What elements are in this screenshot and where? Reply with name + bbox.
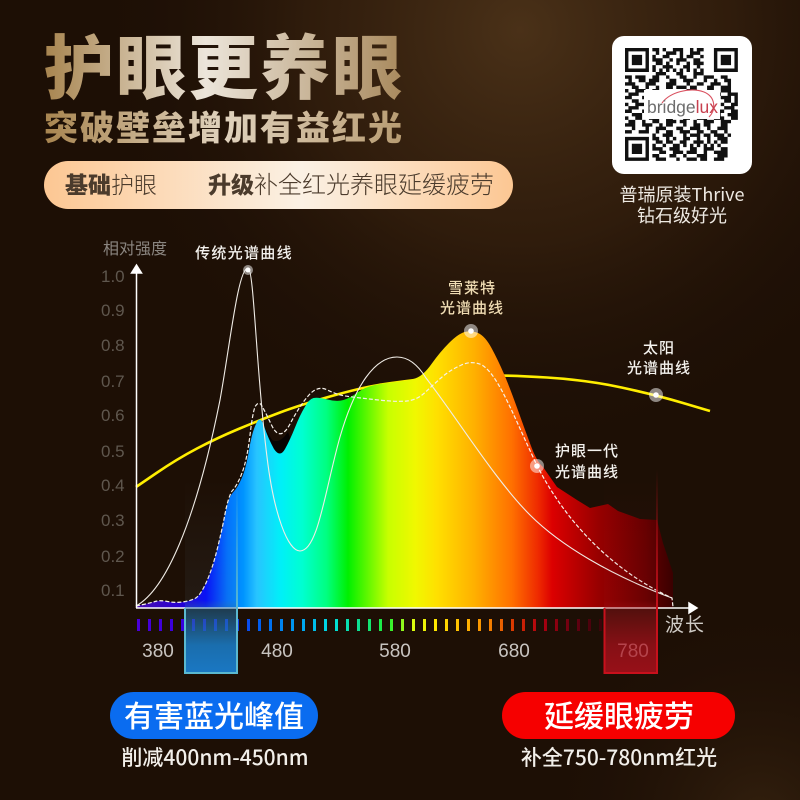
x-axis labels: 380 bbox=[142, 641, 174, 662]
QR caption bbox=[620, 181, 744, 228]
label: sun curve bbox=[627, 340, 691, 377]
red band highlight bbox=[604, 470, 657, 674]
callout: red light bbox=[502, 692, 735, 772]
y-axis tick labels: 0.7 bbox=[101, 372, 125, 391]
y-axis tick labels: 0.6 bbox=[101, 406, 125, 425]
blue band highlight bbox=[185, 480, 237, 674]
marker: traditional bbox=[243, 265, 253, 275]
label: sun curve: 光谱曲线 bbox=[627, 360, 691, 377]
label: first generation curve bbox=[555, 443, 619, 481]
first-generation dashed curve bbox=[136, 363, 673, 607]
y-axis tick labels bbox=[101, 267, 125, 600]
label: shelaite curve: 雪莱特 bbox=[448, 280, 496, 297]
y-axis tick labels: 0.8 bbox=[101, 336, 125, 355]
x-axis labels bbox=[142, 641, 530, 662]
callout caption: 削减400nm-450nm bbox=[121, 742, 309, 772]
y-axis tick labels: 0.9 bbox=[101, 301, 125, 320]
QR modules bbox=[625, 48, 738, 161]
marker: shelaite bbox=[464, 324, 478, 338]
label: shelaite curve bbox=[440, 280, 504, 317]
callout caption: 补全750-780nm红光 bbox=[521, 742, 717, 772]
y-axis tick labels: 0.3 bbox=[101, 511, 125, 530]
QR caption: 钻石级好光 bbox=[637, 202, 727, 228]
feature pill bbox=[44, 161, 513, 209]
label: shelaite curve: 光谱曲线 bbox=[440, 300, 504, 317]
y-axis tick labels: 0.1 bbox=[101, 581, 125, 600]
full spectrum fill bbox=[136, 331, 673, 608]
label 780: 780 bbox=[617, 641, 649, 662]
bridgelux logo: bridgelux bbox=[647, 97, 718, 117]
sun spectrum curve bbox=[136, 375, 710, 487]
callout: blue light bbox=[110, 692, 318, 772]
x-axis arrow bbox=[136, 603, 697, 613]
x-axis labels: 680 bbox=[498, 641, 530, 662]
label: first generation curve: 护眼一代 bbox=[555, 443, 619, 460]
spectrum ticks bbox=[137, 619, 610, 631]
callout title: 有害蓝光峰值 bbox=[124, 692, 304, 736]
y-axis tick labels: 0.4 bbox=[101, 476, 125, 495]
pill text: basic: 基础护眼 bbox=[65, 166, 157, 200]
y-axis tick labels: 1.0 bbox=[101, 267, 125, 286]
subtitle: 突破壁垒增加有益红光 bbox=[44, 101, 404, 150]
label: traditional curve: 传统光谱曲线 bbox=[195, 244, 293, 262]
marker: sun bbox=[649, 388, 663, 402]
pill text: upgrade: 升级补全红光养眼延缓疲劳 bbox=[208, 165, 494, 200]
title: 护眼更养眼 bbox=[44, 13, 404, 114]
label: first generation curve: 光谱曲线 bbox=[555, 464, 619, 481]
y-axis arrow bbox=[132, 265, 142, 608]
QR code card bbox=[612, 36, 752, 174]
y-axis tick labels: 0.2 bbox=[101, 547, 125, 566]
y-axis tick labels: 0.5 bbox=[101, 442, 125, 461]
traditional spectrum curve bbox=[136, 268, 672, 606]
x-axis title: 波长 bbox=[665, 614, 705, 636]
marker: first generation bbox=[530, 459, 544, 473]
y-axis title: 相对强度 bbox=[103, 240, 167, 258]
label: sun curve: 太阳 bbox=[643, 340, 675, 357]
QR caption: 普瑞原装Thrive bbox=[620, 181, 744, 207]
dip shadow bbox=[238, 420, 292, 492]
x-axis labels: 580 bbox=[379, 641, 411, 662]
spectrum chart bbox=[101, 240, 710, 674]
callout title: 延缓眼疲劳 bbox=[544, 692, 694, 736]
x-axis labels: 480 bbox=[261, 641, 293, 662]
